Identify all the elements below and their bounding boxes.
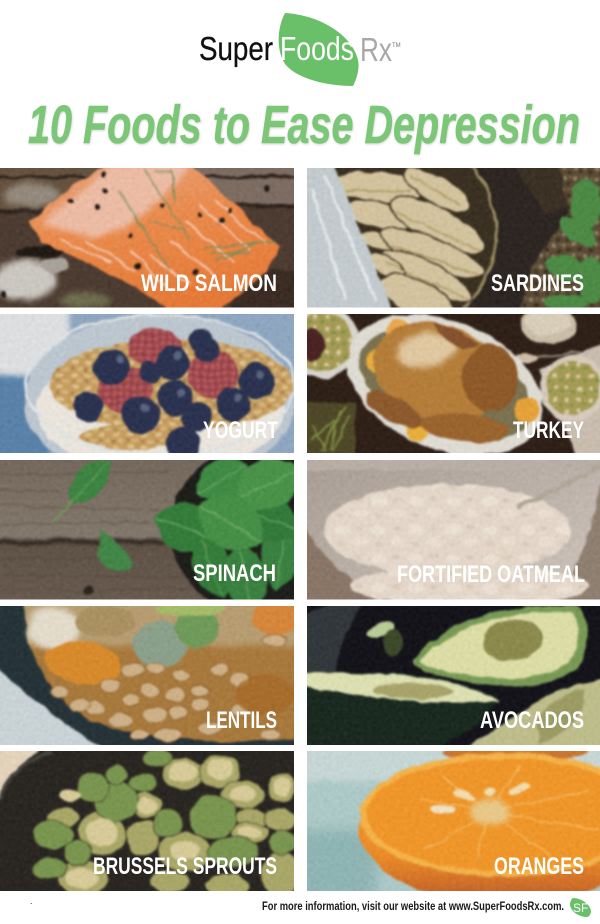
logo word Rx: Rx [360, 31, 392, 68]
logo word Foods: Foods [280, 30, 354, 67]
panel: wild salmon [0, 168, 294, 308]
photo: sliced avocados in pan [297, 596, 600, 755]
photo: bowl of oatmeal [297, 450, 600, 610]
photo: salmon on wood [0, 155, 304, 320]
photo: lentil soup [0, 596, 304, 755]
logo: SuperFoodsRx [199, 13, 401, 86]
photo: tin of sardines [284, 126, 600, 338]
label: lentils: LENTILS [206, 707, 277, 734]
panel: oranges [307, 751, 600, 891]
logo word Super: Super [199, 30, 273, 67]
logo leaf [279, 13, 359, 86]
photo: brussels sprouts in pan [0, 741, 304, 901]
panel: lentils [0, 606, 294, 745]
label: yogurt: YOGURT [203, 417, 278, 444]
stray dot mark: . [30, 896, 33, 906]
panel: fortified oatmeal [307, 460, 600, 600]
photo: halved orange [297, 741, 600, 904]
photo: spinach on wood [0, 444, 354, 617]
photo: yogurt with berries [0, 304, 304, 485]
icon: SF leaf badge: SF [573, 901, 588, 915]
trademark: TM [392, 43, 401, 49]
photo: roast turkey platter [285, 287, 600, 483]
panel: yogurt [0, 314, 294, 453]
panel: avocados [307, 606, 600, 745]
label: spinach: SPINACH [193, 560, 276, 587]
panel: spinach [0, 460, 294, 600]
panel: sardines [307, 168, 600, 308]
panel: brussels sprouts [0, 751, 294, 891]
panel: turkey [307, 314, 600, 453]
icon: SF leaf badge [570, 898, 591, 917]
